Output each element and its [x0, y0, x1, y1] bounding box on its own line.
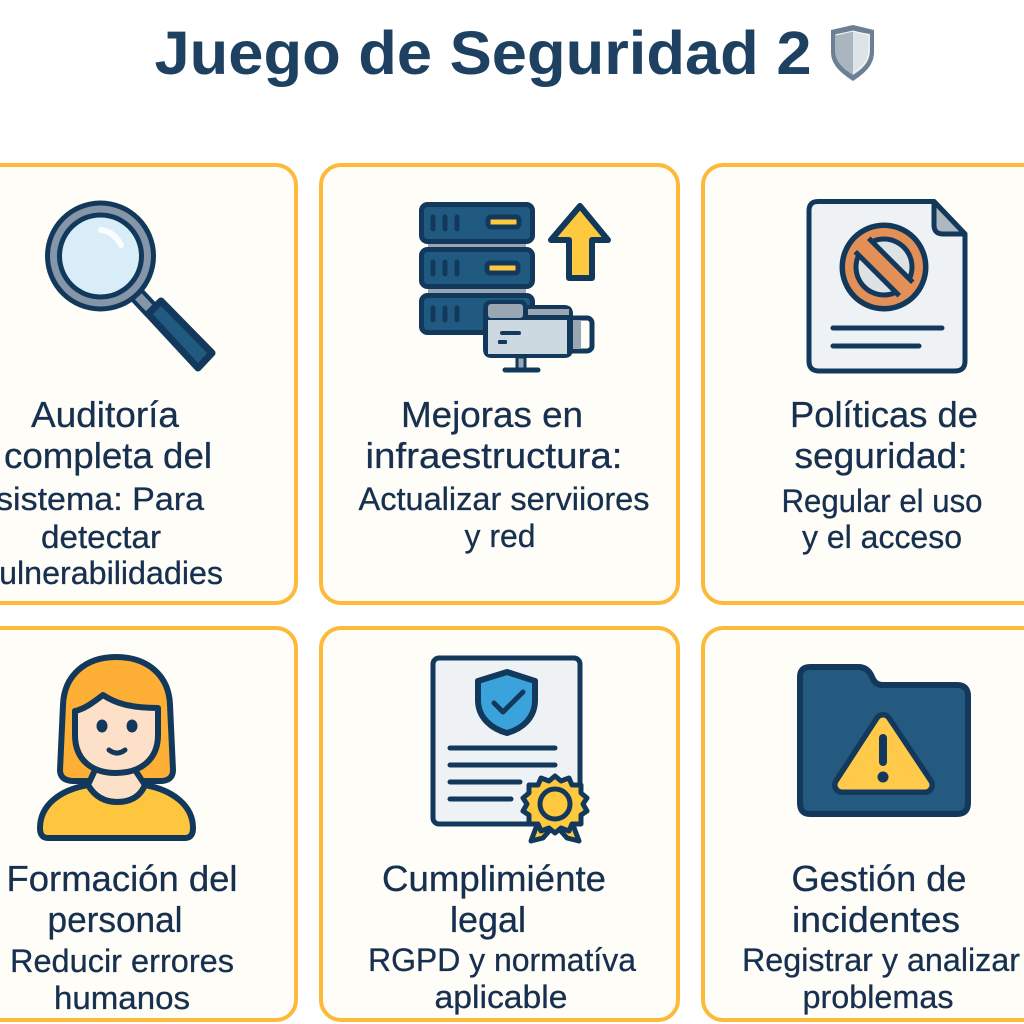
text: infraestructura: infraestructura:: [366, 435, 622, 476]
icon: magnifying glass: [45, 200, 212, 368]
panel: formación: [0, 628, 296, 1020]
text: cumplimiento: aplicable: [434, 979, 568, 1015]
panel: infraestructura: [321, 165, 678, 603]
text: cumplimiento: RGPD y normatíva: [368, 942, 636, 978]
icon: warning folder: [800, 667, 968, 814]
text: cumplimiento: [368, 858, 636, 1015]
text: auditoría: completa del: [4, 435, 212, 476]
text: incidentes: Registrar y analizar: [742, 942, 1020, 978]
text: incidentes: [742, 858, 1020, 1015]
icon: servers with arrow: [422, 204, 608, 370]
panel: auditoría: [0, 165, 296, 603]
title: Juego de Seguridad 2: [154, 19, 812, 87]
text: infraestructura: [358, 394, 650, 554]
text: cumplimiento: Cumplimiénte: [382, 858, 606, 899]
text: formación: humanos: [54, 980, 190, 1016]
text: infraestructura: Mejoras en: [401, 394, 583, 435]
panel: políticas: [703, 165, 1024, 603]
panel: cumplimiento: [321, 628, 678, 1020]
text: infraestructura: y red: [464, 518, 536, 554]
text: formación: [6, 858, 238, 1016]
text: auditoría: [0, 394, 223, 591]
icon: person: [40, 657, 193, 838]
text: auditoría: sistema: Para: [0, 481, 204, 517]
icon: policy document: [809, 202, 965, 371]
text: formación: Formación del: [6, 858, 238, 899]
text: auditoría: Auditoría: [31, 394, 180, 435]
icon: certificate: [433, 658, 587, 841]
text: infraestructura: Actualizar serviiores: [358, 481, 650, 517]
icon: title shield: [831, 25, 874, 81]
text: políticas: Políticas de: [790, 394, 978, 435]
text: incidentes: Gestión de: [792, 858, 966, 899]
text: políticas: seguridad:: [794, 435, 968, 476]
text: cumplimiento: legal: [450, 899, 526, 940]
text: políticas: [782, 394, 982, 555]
text: políticas: y el acceso: [802, 519, 962, 555]
text: formación: Reducir errores: [10, 943, 234, 979]
text: formación: personal: [48, 899, 182, 940]
text: incidentes: incidentes: [792, 899, 960, 940]
text: políticas: Regular el uso: [782, 483, 982, 519]
text: incidentes: problemas: [802, 979, 954, 1015]
panel: incidentes: [703, 628, 1024, 1020]
text: auditoría: detectar: [41, 519, 161, 555]
